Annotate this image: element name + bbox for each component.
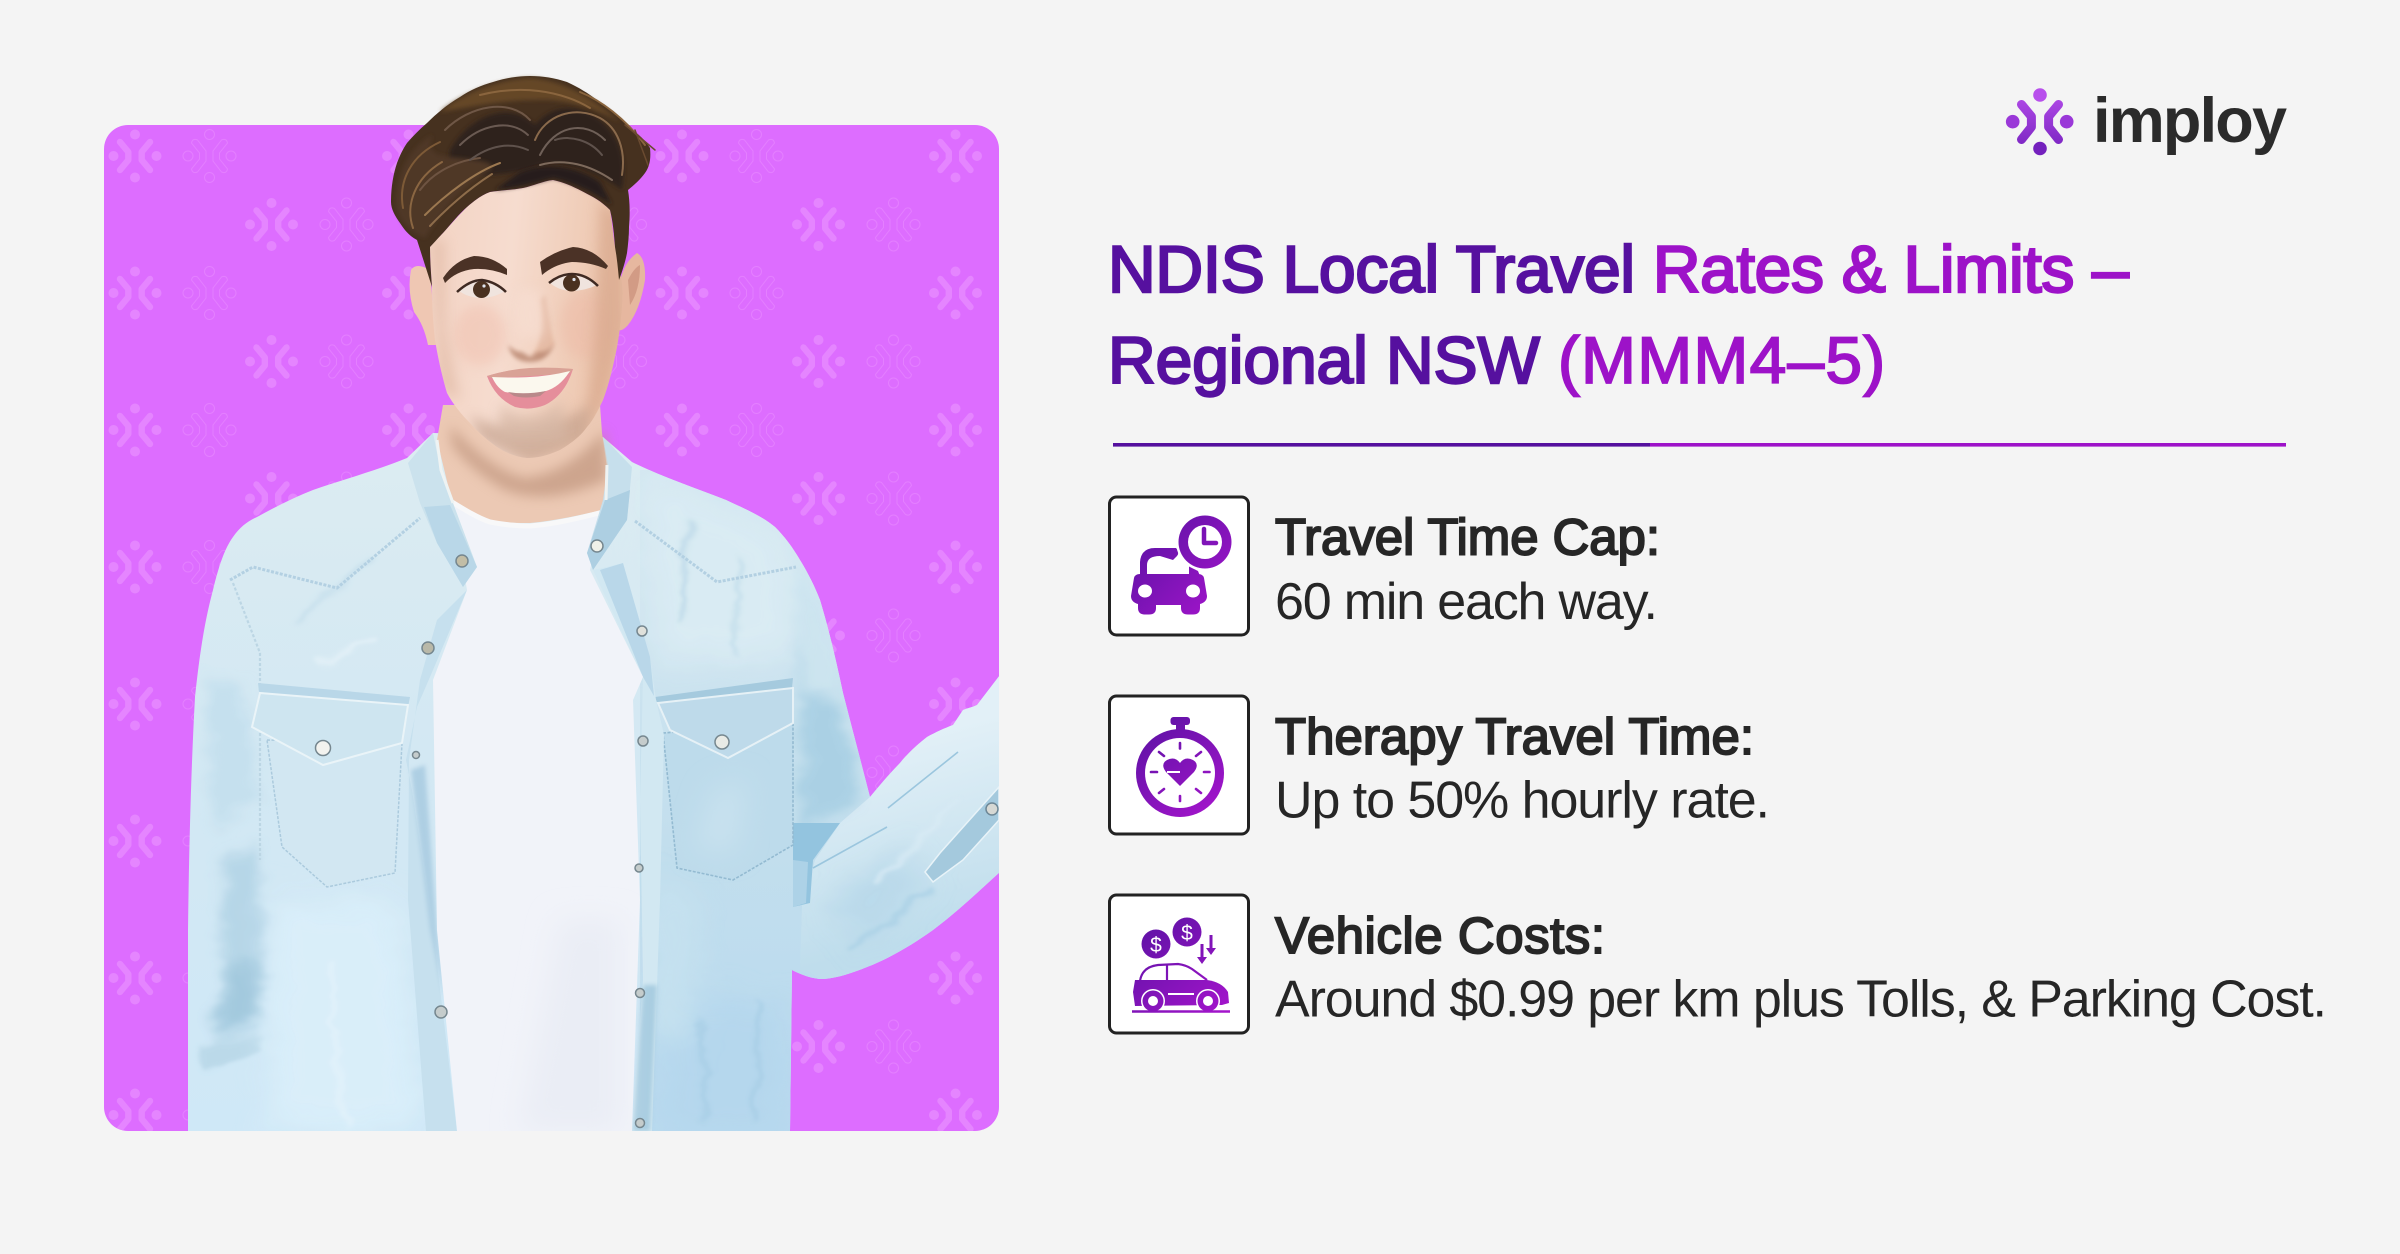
hairline shadow [495, 166, 612, 205]
right chest and sleeve [640, 470, 1000, 1140]
text: travel time cap [1275, 508, 1660, 631]
heading divider [1113, 443, 2286, 447]
collar right [587, 437, 632, 570]
nose [532, 295, 555, 358]
logo watermark pattern [104, 125, 999, 1131]
left pocket [252, 683, 410, 887]
icon: car with coins [1110, 895, 1248, 1033]
t-shirt collar [452, 502, 603, 526]
hair top brown fringe [440, 78, 620, 122]
text: therapy travel time: Therapy Travel Time: [1275, 708, 1754, 765]
neck [437, 405, 607, 523]
arm pit dark fold [793, 823, 840, 907]
right placket strip [640, 696, 664, 1131]
yoke seams [230, 518, 796, 588]
text: therapy travel time [1275, 708, 1770, 830]
text: travel time cap: 60 min each way. [1275, 573, 1658, 631]
photo: smiling man in denim shirt [180, 76, 1010, 1140]
logo: imploy [2006, 86, 2287, 156]
right pocket [655, 678, 793, 880]
left lobe [398, 142, 492, 234]
icon: stopwatch with heart [1110, 696, 1248, 834]
item: vehicle costs [1110, 895, 2327, 1033]
forearm [802, 676, 999, 918]
item: therapy travel time [1110, 696, 1770, 834]
shirt buttons [316, 540, 729, 1128]
left placket strip [406, 590, 467, 1131]
title: NDIS Local Travel Rates & Limits – [1108, 232, 2129, 306]
text: vehicle costs: Around $0.99 per km plus Tolls, & Parking Cost. [1275, 970, 2327, 1028]
panel: purple photo background [104, 125, 999, 1131]
title [1108, 232, 2129, 397]
face shading [432, 200, 625, 465]
hair strands [402, 90, 655, 228]
icon: car with coins: $ [1181, 922, 1193, 945]
fabric shading and wrinkles [195, 470, 960, 1140]
mouth [487, 368, 573, 409]
text: vehicle costs: Vehicle Costs: [1275, 907, 1605, 964]
eyebrows [443, 247, 608, 283]
eyes [457, 274, 598, 298]
icon: car with coins: $ [1150, 934, 1162, 957]
icon: car with clock [1110, 497, 1248, 635]
item: travel time cap [1110, 497, 1660, 635]
logo wordmark: imploy [2093, 86, 2287, 156]
text: vehicle costs [1275, 907, 2327, 1028]
hair [391, 76, 655, 287]
t-shirt shading [520, 920, 620, 1131]
cuff tab [925, 787, 999, 882]
sleeve-body seam left [233, 583, 260, 860]
text: therapy travel time: Up to 50% hourly rate. [1275, 772, 1770, 830]
face [430, 180, 625, 465]
ears [410, 253, 645, 345]
shirt [180, 430, 1010, 1140]
shirt base [180, 430, 1010, 1140]
logo mark [2006, 88, 2074, 155]
white t-shirt [433, 502, 643, 1131]
hair dark centre [445, 109, 624, 190]
collar left [408, 433, 477, 587]
title: Regional NSW (MMM4–5) [1108, 323, 1886, 397]
text: travel time cap: Travel Time Cap: [1275, 508, 1660, 566]
arm seams [813, 752, 958, 868]
